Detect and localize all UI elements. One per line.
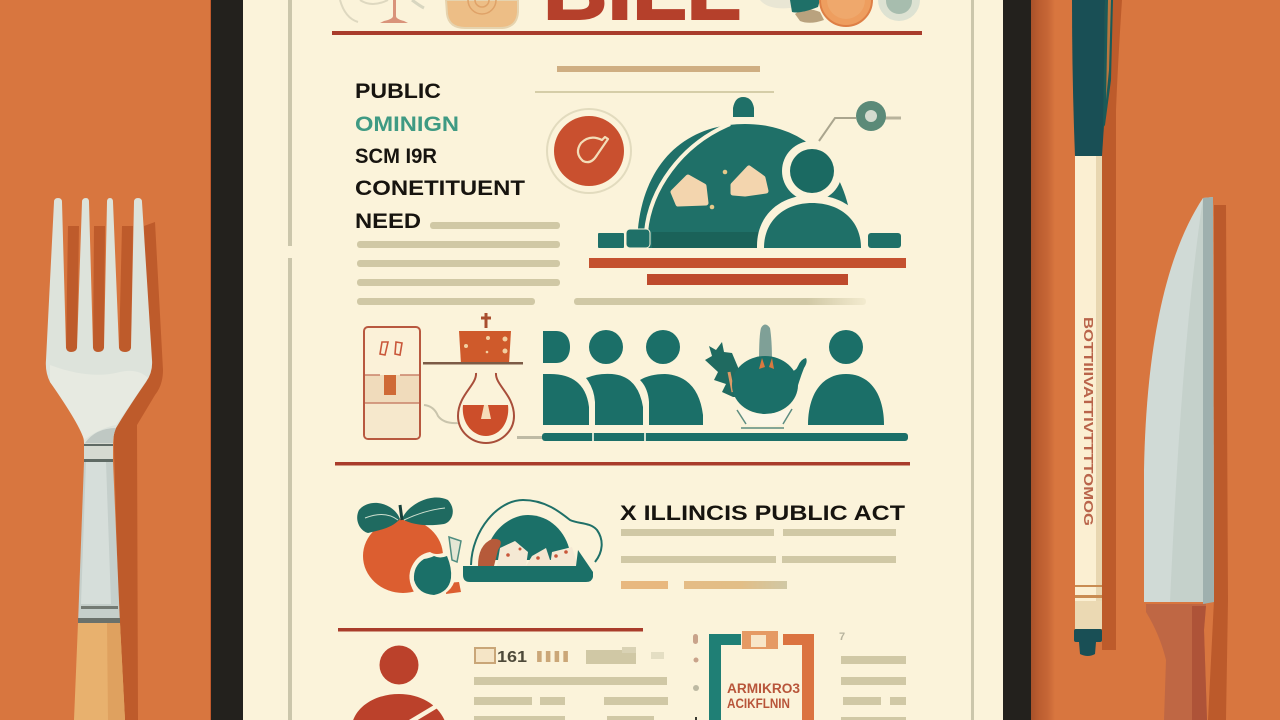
side text lines: 7 [839, 631, 845, 643]
pen tip [1074, 629, 1102, 642]
fork handle [78, 462, 120, 624]
label row: IIII [535, 649, 570, 666]
icon: audience people [543, 330, 884, 425]
knife blade [1144, 197, 1214, 602]
icon: knife [1144, 197, 1228, 720]
icon: tomato [357, 497, 461, 597]
knife handle [1146, 604, 1207, 720]
icon: fork [46, 198, 163, 720]
icon: fridge [364, 327, 420, 439]
icon: flask [424, 373, 514, 443]
panel: bottom right clipboard section [693, 631, 906, 720]
pen bands [1075, 585, 1102, 629]
food pieces in dish [478, 539, 578, 566]
text block: public opinion list: OMINIGN [355, 112, 459, 136]
pen body [1075, 156, 1102, 601]
text placeholder lines [357, 222, 866, 305]
clipboard text: ARMIKRO3 [727, 681, 800, 696]
panel: bottom left person section [338, 628, 668, 720]
cloche dome [637, 124, 853, 248]
label row: 161 [497, 649, 527, 666]
pen cap [1072, 0, 1105, 156]
food pieces [673, 168, 766, 204]
icon: orange pot [423, 313, 523, 364]
chart: cloche illustration [589, 97, 906, 285]
panel: header [332, 0, 922, 36]
connector and node [819, 101, 901, 141]
icon: orange dish [446, 0, 518, 28]
text block: public opinion list: PUBLIC [355, 79, 441, 103]
icon: clipboard [709, 631, 814, 720]
pen clip [1103, 0, 1113, 128]
fork wood grip [74, 623, 125, 720]
icon: sketched glass [340, 0, 424, 23]
cloche knob [733, 97, 754, 117]
text block: public opinion list: NEED [355, 209, 421, 233]
icon: food plate [760, 0, 920, 26]
side text lines [839, 631, 906, 720]
text block: public opinion list: SCM I9R [355, 144, 437, 168]
fork head [46, 198, 152, 443]
pen barrel text: BOTTIIIVATTIVTTTTOMOG [1081, 317, 1095, 526]
heading: X ILLINCIS PUBLIC ACT [620, 501, 905, 525]
icon: person with slash [352, 646, 446, 720]
fork shadow [114, 222, 163, 720]
icon: teapot with plant [705, 324, 807, 428]
panel: menu board [210, 0, 1055, 720]
person over cloche [757, 141, 869, 250]
body lines [621, 529, 896, 589]
panel: people and kitchen row [364, 313, 908, 443]
pen shadow [1102, 0, 1122, 650]
decorative top bars [535, 66, 774, 93]
label row [475, 647, 664, 666]
side dots [693, 634, 699, 720]
text block: public opinion list [355, 79, 525, 233]
header rule [332, 31, 922, 35]
body lines [474, 677, 668, 720]
icon: red meat badge [547, 109, 631, 193]
knife shadow [1208, 205, 1228, 720]
section rule [335, 462, 910, 466]
fork collar [84, 443, 113, 462]
clipboard text [727, 681, 800, 711]
text block: public opinion list: CONETITUENT [355, 176, 525, 200]
section rule [338, 628, 643, 632]
icon: pen [1072, 0, 1122, 656]
clipboard text: ACIKFLNIN [727, 696, 790, 711]
red tray bars [589, 258, 906, 285]
panel: illinois public act [357, 497, 905, 597]
audience base bar [517, 433, 908, 441]
tray blocks [598, 229, 901, 248]
icon: covered food dish [463, 500, 602, 582]
